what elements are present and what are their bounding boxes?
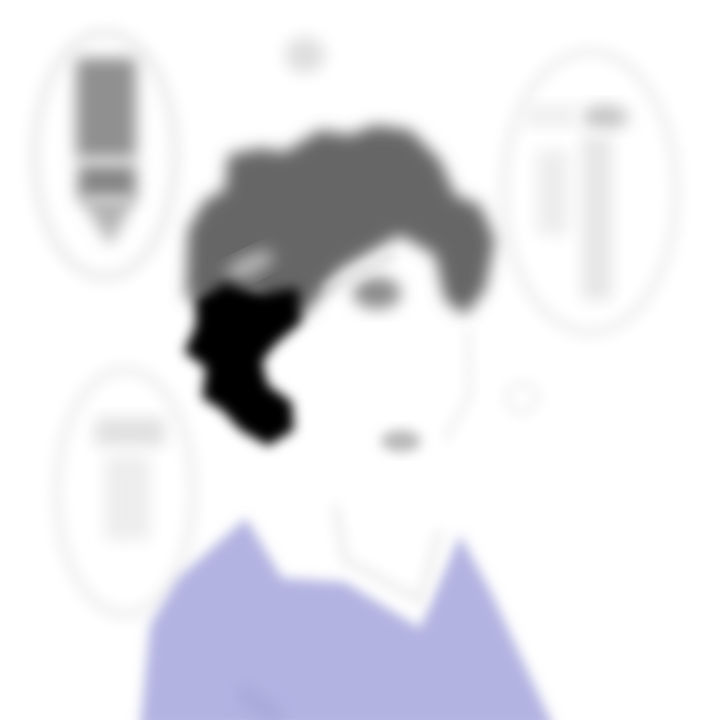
- mouth: [381, 430, 421, 452]
- eye: [325, 255, 401, 309]
- hair: grey: [186, 125, 495, 315]
- speech bubble: lower left: [57, 370, 193, 614]
- speech bubble: top centre: [275, 37, 325, 128]
- face outline: [445, 330, 470, 440]
- small mark: [507, 384, 537, 412]
- hair: black shadow: [184, 282, 302, 446]
- shirt: [140, 518, 555, 720]
- speech bubble: top left: [35, 33, 175, 277]
- speech bubble: top right: [504, 52, 676, 332]
- neck and collar: [335, 505, 440, 600]
